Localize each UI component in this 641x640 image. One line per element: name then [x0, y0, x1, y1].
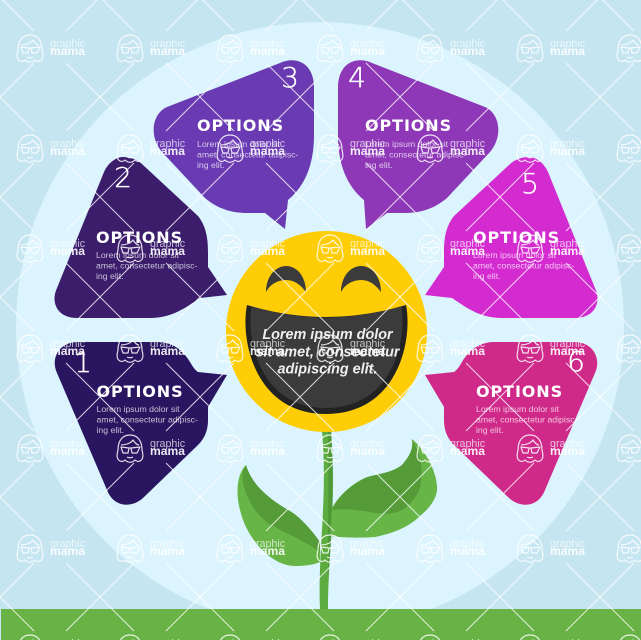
heading: OPTIONS [96, 382, 184, 401]
body text: ing elit. [96, 271, 124, 281]
body text: Lorem ipsum dolor sit [197, 139, 281, 149]
heading: OPTIONS [476, 382, 563, 401]
number 4: 4 [348, 61, 366, 94]
heading: OPTIONS [197, 116, 284, 135]
body text: ing elit. [197, 160, 225, 170]
number 5: 5 [521, 167, 539, 200]
panel: option 3 [154, 60, 314, 229]
panel: option 6 [425, 342, 597, 505]
body text: Lorem ipsum dolor sit [365, 139, 449, 149]
left eye [266, 266, 306, 292]
flower stem [320, 431, 333, 609]
heading: OPTIONS [365, 116, 452, 135]
number 6: 6 [567, 345, 585, 378]
ground strip [1, 609, 641, 640]
smiley face flower centre [226, 231, 427, 432]
body text: ing elit. [473, 271, 501, 281]
panel: option 4 [338, 60, 498, 229]
number 1: 1 [74, 346, 92, 379]
mouth inner [250, 306, 403, 408]
number 2: 2 [114, 161, 132, 194]
mouth outer [245, 305, 408, 414]
body text: Lorem ipsum dolor sit [96, 250, 180, 260]
centre text: adipiscing elit. [278, 362, 377, 378]
body text: Lorem ipsum dolor sit [476, 404, 560, 414]
body text: amet, consectetur adipisc- [96, 414, 198, 424]
body text: ing elit. [365, 160, 393, 170]
body text: amet, consectetur adipisc- [473, 260, 575, 270]
panel: option 5 [425, 157, 598, 318]
number 3: 3 [281, 61, 299, 94]
left leaf [238, 465, 320, 566]
heading: OPTIONS [473, 228, 560, 247]
body text: amet, consectetur adipisc- [96, 260, 198, 270]
body text: ing elit. [96, 425, 124, 435]
body text: Lorem ipsum dolor sit [96, 404, 180, 414]
centre text: sit amet, consectetur [256, 344, 401, 360]
centre text: Lorem ipsum dolor [262, 327, 394, 343]
heading: OPTIONS [96, 228, 183, 247]
face circle [226, 231, 427, 432]
right eye [341, 266, 381, 292]
body text: amet, consectetur adipisc- [365, 150, 467, 160]
right leaf [330, 439, 437, 538]
body text: ing elit. [476, 425, 504, 435]
panel: option 1 [55, 342, 227, 505]
body text: amet, consectetur adipisc- [197, 150, 299, 160]
body text: amet, consectetur adipisc- [476, 414, 578, 424]
panel: option 2 [54, 157, 227, 318]
body text: Lorem ipsum dolor sit [473, 250, 557, 260]
